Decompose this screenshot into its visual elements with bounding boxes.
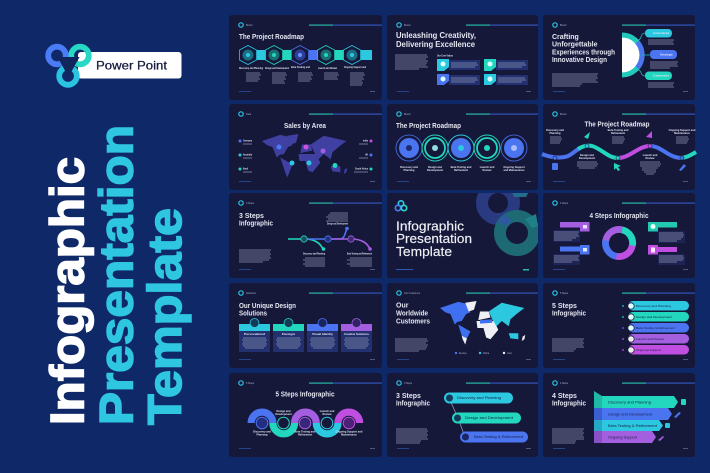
slide: Infographic Presentation Template cover: Template <box>396 244 452 259</box>
slide: 4 Steps Infographic donut <box>543 193 695 278</box>
slide: Crafting Unforgettable Experiences: Brand <box>560 24 567 27</box>
slide: 3 Steps Infographic: 3 Steps <box>239 213 264 220</box>
slide: 3 Steps Infographic: 3 Steps <box>246 202 255 205</box>
slide: The Project Roadmap wave: Ongoing Support and <box>669 128 696 132</box>
slide: The Project Roadmap wave: Beta Testing and <box>608 128 629 132</box>
slide: The Project Roadmap hexagons: Brand <box>246 24 253 27</box>
slide: 4 Steps Infographic donut: 4 Steps <box>560 202 569 205</box>
slide: Unleashing Creativity: Our Core Values <box>437 54 453 58</box>
slide: 5 Steps Infographic pills: Beta Testing & Refinement <box>636 326 675 330</box>
slide: The Project Roadmap wave: Design and <box>580 153 594 157</box>
slide: The Project Roadmap circles: Planning <box>404 168 415 172</box>
slide: The Project Roadmap wave: Planning <box>550 131 561 135</box>
slide: 5 Steps Infographic pills: Design and Development <box>636 315 672 319</box>
slide: Our Worldwide Customers: Asia <box>507 352 512 355</box>
slide: The Project Roadmap hexagons: Ongoing Support and <box>344 65 366 69</box>
slide: The Project Roadmap circles: Discovery and <box>400 165 418 169</box>
slide: 3 Steps Infographic <box>229 193 382 278</box>
slide: The Project Roadmap hexagons: Launch and Review <box>318 66 338 70</box>
slide: The Project Roadmap circles: Development <box>427 168 443 172</box>
slide: 5 Steps Infographic snake: Beta Testing and <box>295 430 316 434</box>
slide: Our Unique Design Solutions: Personalized <box>244 332 266 336</box>
slide: 5 Steps Infographic snake: Launch and <box>320 409 335 413</box>
slide: Our Unique Design Solutions: Solutions <box>239 310 267 318</box>
badge: Power Point: Power Point <box>96 58 168 72</box>
slide: The Project Roadmap wave: Launch and <box>643 153 658 157</box>
slide: 3 Steps Infographic pills: Beta Testing & Refinement <box>474 435 523 439</box>
slide: The Project Roadmap circles: Ongoing Support <box>503 165 525 169</box>
slide: Our Worldwide Customers: Worldwide <box>396 310 428 318</box>
slide: 5 Steps Infographic pills: Infographic <box>552 310 586 318</box>
slide: 4 Steps Infographic arrows: Ongoing Support <box>608 436 637 440</box>
slide: Crafting Unforgettable Experiences: Experiences through <box>552 50 615 56</box>
slide: Unleashing Creativity: Delivering Excellence <box>396 39 475 49</box>
slide: Crafting Unforgettable Experiences: Communication <box>653 74 669 78</box>
slide: Unleashing Creativity: Brand <box>404 24 411 27</box>
slide: 5 Steps Infographic pills: Ongoing Support <box>636 348 661 352</box>
slide: 3 Steps Infographic pills: Discovery and Planning <box>457 396 501 400</box>
slide: Our Unique Design Solutions <box>229 283 382 368</box>
slide: 4 Steps Infographic arrows: Discovery and Planning <box>608 400 651 404</box>
slide: Sales by Area: Sales by Area <box>284 121 327 130</box>
slide: 5 Steps Infographic snake: Design and <box>277 409 291 413</box>
slide: 3 Steps Infographic pills: 3 Steps <box>404 382 413 385</box>
slide: 4 Steps Infographic arrows: 4 Steps <box>552 393 577 400</box>
slide: Sales by Area: South Africa <box>355 166 368 170</box>
slide: 5 Steps Infographic snake: Review <box>323 412 332 416</box>
slide: Our Unique Design Solutions: Design <box>282 332 296 336</box>
slide: 3 Steps Infographic: Infographic <box>239 220 273 228</box>
slide: The Project Roadmap hexagons: Beta Testing and <box>291 65 310 69</box>
slide: Unleashing Creativity: Unleashing Creativity, <box>396 30 476 40</box>
slide: 5 Steps Infographic snake: 5 Steps <box>246 382 255 385</box>
world map <box>262 134 347 178</box>
slide: 3 Steps Infographic: Beta Testing and Refinement <box>347 252 372 256</box>
slide: 5 Steps Infographic snake: Maintenance <box>341 432 357 436</box>
title: Infographic Presentation Template: Presentation <box>90 125 144 425</box>
slide: Sales by Area: Brazil <box>243 166 248 170</box>
badge: Power Point <box>48 47 182 85</box>
slide: 4 Steps Infographic arrows: Design and Development <box>608 412 652 416</box>
slide: Crafting Unforgettable Experiences: Customized <box>653 31 669 35</box>
slide: Sales by Area: Data <box>246 113 252 116</box>
slide: The Project Roadmap wave: The Project Roadmap <box>584 120 650 128</box>
slide: The Project Roadmap wave: Development <box>579 156 595 160</box>
slide: The Project Roadmap wave <box>542 104 696 190</box>
slide: 5 Steps Infographic snake: Development <box>275 412 292 416</box>
slides grid <box>229 15 696 457</box>
slide: Sales by Area <box>229 104 382 190</box>
slide: The Project Roadmap circles: Beta Testing and <box>451 165 472 169</box>
slide: The Project Roadmap circles: The Project Roadmap <box>396 121 461 130</box>
slide: Infographic Presentation Template cover <box>387 187 538 278</box>
slide: 3 Steps Infographic pills: 3 Steps <box>396 393 421 400</box>
slide: 5 Steps Infographic snake <box>229 373 382 457</box>
title: Infographic Presentation Template: Infographic <box>42 157 94 425</box>
slide: Our Unique Design Solutions: Our Unique Design <box>239 303 296 310</box>
slide: Crafting Unforgettable Experiences: Crafting <box>552 34 579 41</box>
slide: The Project Roadmap circles: Design and <box>428 165 442 169</box>
slide: The Project Roadmap hexagons: The Project Roadmap <box>239 32 304 41</box>
slide: 3 Steps Infographic pills <box>387 373 538 457</box>
slide: Our Unique Design Solutions: Visual Identity <box>312 332 334 336</box>
slide: Unleashing Creativity <box>387 15 538 100</box>
slide: Crafting Unforgettable Experiences: Unforgettable <box>552 42 598 48</box>
title: Infographic Presentation Template <box>42 125 192 425</box>
slide: Our Unique Design Solutions: Solutions <box>246 292 257 295</box>
slide: The Project Roadmap circles <box>387 104 538 190</box>
slide: Our Worldwide Customers: Europe <box>459 352 467 355</box>
slide: 5 Steps Infographic pills: 5 Steps <box>560 292 569 295</box>
slide: 4 Steps Infographic arrows: 4 Steps <box>560 382 569 385</box>
slide: 4 Steps Infographic donut: 4 Steps Infographic <box>590 213 649 220</box>
slide: 5 Steps Infographic snake: Discovery and <box>253 430 271 434</box>
slide: The Project Roadmap wave: Brand <box>560 113 567 116</box>
slide: 3 Steps Infographic pills: Infographic <box>396 400 430 408</box>
title: Infographic Presentation Template: Template <box>139 208 192 425</box>
slide: Sales by Area: India <box>363 138 368 142</box>
slide: Sales by Area: Australia <box>243 152 252 156</box>
slide: 5 Steps Infographic snake: 5 Steps Infographic <box>276 392 335 398</box>
slide: Sales by Area: UK <box>365 152 368 156</box>
slide: 3 Steps Infographic: Discovery and Planning <box>303 252 325 256</box>
slide: Our Worldwide Customers: Customers <box>396 318 430 326</box>
slide: The Project Roadmap circles: Brand <box>404 113 411 116</box>
slide: Our Worldwide Customers <box>387 283 538 368</box>
slide: Our Worldwide Customers: Our Customers <box>404 292 421 295</box>
world map coloured <box>440 301 525 344</box>
slide: Our Worldwide Customers: Our <box>396 302 409 310</box>
slide: 5 Steps Infographic snake: Ongoing Support and <box>336 430 363 434</box>
slide: The Project Roadmap circles: Launch and <box>480 165 495 169</box>
slide: The Project Roadmap circles: Review <box>483 168 492 172</box>
slide: 4 Steps Infographic arrows: Beta Testing & Refinement <box>608 424 657 428</box>
slide: Crafting Unforgettable Experiences <box>543 15 695 100</box>
slide: Crafting Unforgettable Experiences: Strategic <box>660 52 674 56</box>
slide: The Project Roadmap hexagons: Design and Development <box>265 66 289 70</box>
slide: 5 Steps Infographic snake: Planning <box>257 432 268 436</box>
slide: The Project Roadmap wave: Discovery and <box>546 128 564 132</box>
slide: 5 Steps Infographic pills: Launch and Review <box>636 337 665 341</box>
slide: 5 Steps Infographic snake: Refinement <box>298 432 312 436</box>
slide: 5 Steps Infographic pills: 5 Steps <box>552 303 577 310</box>
slide: 5 Steps Infographic pills: Discovery and Planning <box>636 304 671 308</box>
slide: The Project Roadmap wave: Review <box>646 156 655 160</box>
slide: Crafting Unforgettable Experiences: Innovative Design <box>552 57 607 64</box>
slide: Our Unique Design Solutions: Creative Solutions <box>344 332 370 336</box>
slide: 3 Steps Infographic: Design and Development <box>327 222 348 226</box>
slide: Infographic Presentation Template cover: Presentation <box>396 231 472 246</box>
slide: 4 Steps Infographic arrows <box>543 373 695 457</box>
slide: 5 Steps Infographic pills <box>543 283 695 368</box>
slide: The Project Roadmap circles: and Maintenance <box>503 168 525 172</box>
slide: Sales by Area: Germany <box>243 138 252 142</box>
slide: The Project Roadmap wave: Maintenance <box>674 131 690 135</box>
slide: The Project Roadmap hexagons <box>229 15 382 100</box>
slide: 4 Steps Infographic arrows: Infographic <box>552 400 586 408</box>
slide: Our Worldwide Customers: Africa <box>483 352 490 355</box>
slide: 3 Steps Infographic pills: Design and Development <box>465 416 513 420</box>
slide: The Project Roadmap hexagons: Discovery and Planning <box>239 66 263 70</box>
slide: The Project Roadmap circles: Refinement <box>454 168 468 172</box>
donut chart <box>605 229 633 257</box>
slide: Infographic Presentation Template cover: Infographic <box>396 218 465 234</box>
slide: The Project Roadmap wave: Refinement <box>611 131 625 135</box>
